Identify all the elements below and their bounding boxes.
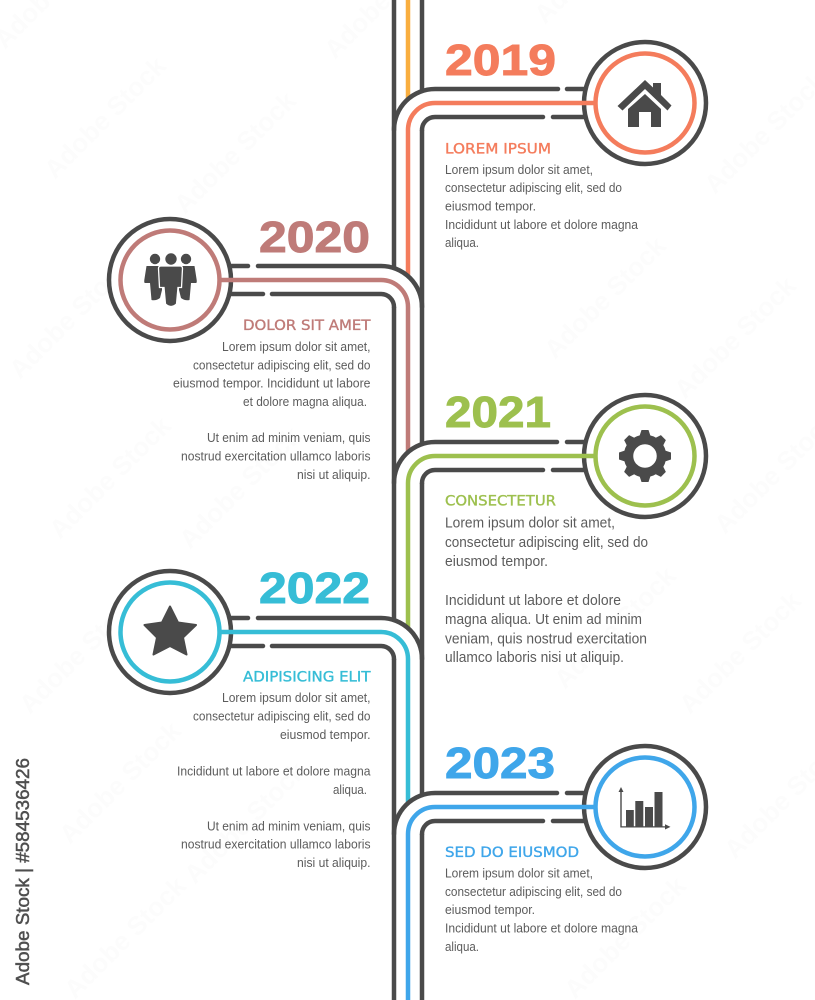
text block: 2019 body: aliqua.: [445, 235, 479, 250]
panel: 2022: [109, 565, 422, 870]
circle: 2019 outer ring: [584, 42, 706, 164]
year: 2019: 2019: [445, 37, 556, 85]
text block: 2019 body: eiusmod tempor.: [445, 198, 536, 214]
text: Adobe Stock: [168, 85, 302, 219]
text block: 2022 body: Lorem ipsum dolor sit amet,: [222, 690, 370, 705]
text block: 2023 body: Lorem ipsum dolor sit amet,: [445, 866, 593, 881]
text: Adobe Stock: [673, 585, 807, 719]
text block: 2020 body: Lorem ipsum dolor sit amet,: [222, 339, 370, 354]
circle: 2022 outer ring: [109, 571, 231, 693]
heading: Consectetur: CONSECTETUR: [445, 494, 556, 510]
icon: star: [144, 606, 196, 654]
text block: 2023 body: consectetur adipiscing elit, sed do: [445, 884, 622, 899]
text: Adobe Stock: [53, 715, 187, 849]
circle: 2021 outer ring: [584, 395, 706, 517]
text block: 2019 body: Incididunt ut labore et dolore magna: [445, 217, 639, 232]
icon: house: [618, 80, 672, 127]
text block: 2022 body: consectetur adipiscing elit, sed do: [193, 709, 370, 724]
connector: 2019 dark rails: [394, 89, 590, 130]
icon: bar chart: [618, 787, 670, 830]
heading: Sed Do Eiusmod: SED DO EIUSMOD: [445, 845, 579, 861]
heading: Adipisicing Elit: ADIPISICING ELIT: [243, 670, 371, 686]
text: Adobe Stock: [38, 50, 172, 184]
text: Adobe Stock: [13, 585, 147, 719]
panel: 2021: [394, 389, 706, 666]
text: Adobe Stock: [178, 755, 312, 889]
text block: 2022 body: nostrud exercitation ullamco laboris: [181, 837, 371, 852]
text: Adobe Stock: [668, 270, 802, 404]
text block: 2022 body: aliqua.: [333, 782, 367, 797]
year: 2022: 2022: [259, 565, 370, 613]
text block: 2020 body: [173, 339, 371, 482]
panel: 2019: [394, 37, 706, 250]
text: Adobe Stock: [548, 560, 682, 694]
year: 2020: 2020: [259, 214, 370, 262]
panel: 2023: [394, 740, 706, 954]
icon: people: [144, 253, 197, 306]
connector: 2019 coral rail: [408, 103, 596, 130]
text block: 2021 body: Lorem ipsum dolor sit amet,: [445, 516, 615, 532]
text block: 2021 body: [445, 516, 648, 666]
connector: 2023 blue rail: [408, 807, 596, 834]
text block: 2020 body: et dolore magna aliqua.: [243, 394, 367, 409]
circle: 2020 outer ring: [109, 219, 231, 341]
text block: 2022 body: nisi ut aliquip.: [297, 855, 370, 870]
text: Adobe Stock: [3, 250, 137, 384]
text: Adobe Stock: [43, 410, 177, 544]
circle: 2020 inner ring: [120, 230, 220, 330]
text block: 2021 body: eiusmod tempor.: [445, 554, 548, 570]
text block: 2020 body: Ut enim ad minim veniam, quis: [207, 430, 371, 445]
text block: 2022 body: Incididunt ut labore et dolore magna: [177, 764, 371, 779]
connector: 2022 dark rails: [225, 618, 422, 659]
text block: 2022 body: Ut enim ad minim veniam, quis: [207, 818, 371, 833]
year: 2021: 2021: [445, 389, 551, 437]
year: 2023: 2023: [445, 740, 555, 788]
text block: 2021 body: ullamco laboris nisi ut aliquip.: [445, 650, 624, 666]
circle: 2023 inner ring: [596, 758, 694, 856]
text block: 2021 body: Incididunt ut labore et dolore: [445, 593, 621, 609]
text block: 2023 body: Incididunt ut labore et dolore magna: [445, 921, 639, 936]
text block: 2020 body: consectetur adipiscing elit, sed do: [193, 358, 370, 372]
text block: 2023 body: aliqua.: [445, 939, 479, 954]
text block: 2022 body: [177, 690, 371, 870]
text block: 2019 body: consectetur adipiscing elit, sed do: [445, 180, 622, 195]
connector: 2021 dark rails: [394, 442, 590, 483]
text block: 2020 body: nostrud exercitation ullamco laboris: [181, 449, 371, 464]
text block: 2021 body: consectetur adipiscing elit, sed do: [445, 535, 648, 551]
text block: 2021 body: magna aliqua. Ut enim ad minim: [445, 612, 642, 628]
text block: 2023 body: eiusmod tempor.: [445, 902, 535, 917]
text block: 2022 body: eiusmod tempor.: [280, 727, 370, 742]
connector: 2020 dark rails: [225, 266, 422, 307]
connector: 2023 dark rails: [394, 793, 590, 834]
text block: 2019 body: Lorem ipsum dolor sit amet,: [445, 162, 593, 177]
stock image credit: Adobe Stock | #584536426: [13, 758, 33, 985]
text block: 2020 body: eiusmod tempor. Incididunt ut labore: [173, 376, 370, 391]
connector: 2021 green rail: [408, 456, 596, 483]
connector: 2020 rose rail: [220, 280, 408, 307]
text block: 2021 body: veniam, quis nostrud exercitation: [445, 631, 647, 647]
circle: 2019 inner ring: [596, 54, 694, 152]
circle: 2021 inner ring: [596, 406, 694, 506]
vertical timeline rails: [394, 0, 422, 1000]
text: Adobe Stock: [173, 420, 307, 554]
heading: Dolor Sit Amet: DOLOR SIT AMET: [243, 318, 371, 334]
text block: 2023 body: [445, 866, 639, 954]
panel: 2020: [109, 214, 422, 482]
icon: gear: [619, 430, 671, 482]
circle: 2023 outer ring: [584, 746, 706, 868]
text block: 2020 body: nisi ut aliquip.: [297, 467, 370, 482]
connector: 2022 cyan rail: [220, 632, 408, 659]
heading: Lorem Ipsum: LOREM IPSUM: [445, 142, 551, 158]
circle: 2022 inner ring: [120, 582, 220, 682]
text block: 2019 body: [445, 162, 639, 250]
text: Adobe Stock: [538, 230, 672, 364]
